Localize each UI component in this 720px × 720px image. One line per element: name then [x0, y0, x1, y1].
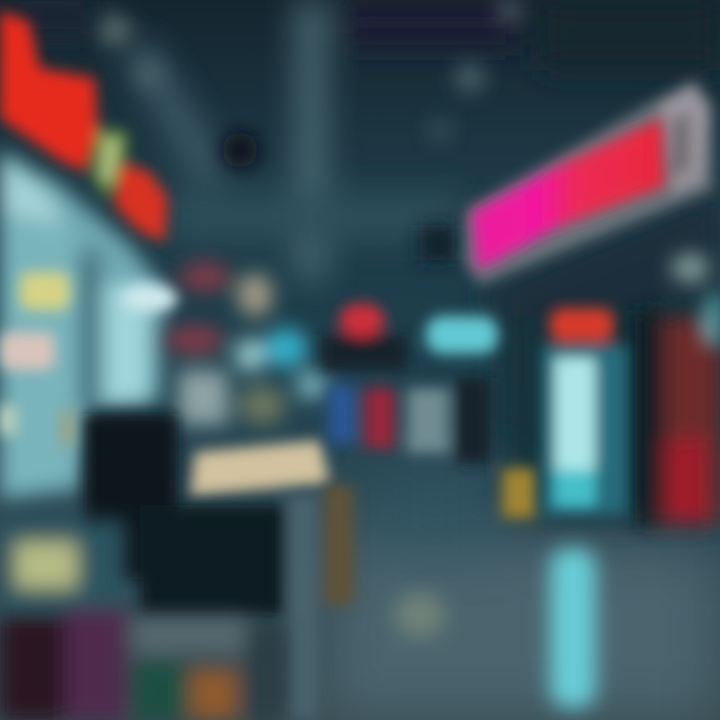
- ceiling: dark beams and lights: [0, 0, 720, 280]
- left store front: pale teal display: [0, 150, 165, 500]
- floor reflection: cyan light: [395, 548, 596, 708]
- right red column: [635, 253, 720, 525]
- dark counter blocks foreground: [85, 414, 354, 720]
- right lit column with red cap: [542, 308, 632, 515]
- cream counter: [190, 440, 330, 496]
- lower left display: [0, 520, 285, 720]
- red neon sign left: [0, 10, 168, 242]
- right dark wall: [480, 190, 720, 530]
- pink neon sign: panel: [472, 118, 665, 270]
- floor: reflective grey teal: [320, 470, 720, 720]
- centre red and cream signs: [165, 262, 329, 425]
- ceiling lights: [99, 0, 522, 260]
- pink neon sign: frame: [464, 80, 712, 285]
- left store product labels: [0, 272, 178, 445]
- mid store: red sign, cyan sign, shoppers: [322, 303, 536, 518]
